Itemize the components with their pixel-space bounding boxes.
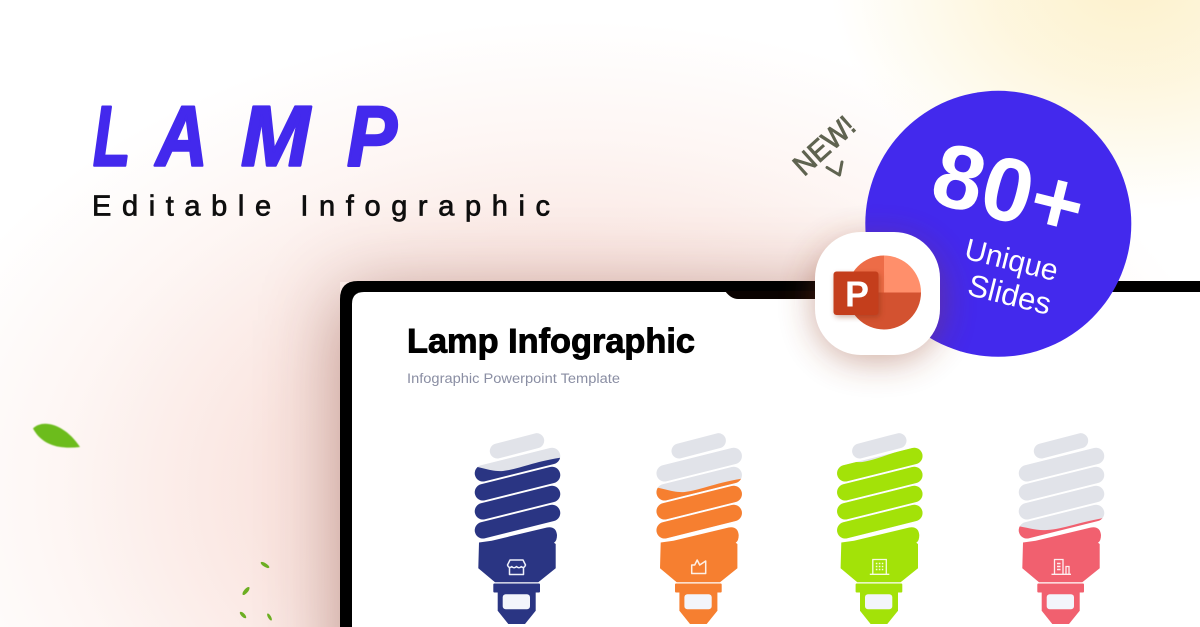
icon: store	[508, 560, 526, 574]
label: NEW!: NEW!	[787, 110, 862, 182]
bulb 2: orange, factory icon	[660, 441, 739, 624]
heading: LAMP: P	[347, 89, 397, 184]
bulb 3: green, building icon	[841, 441, 919, 624]
icon: towers	[1052, 560, 1071, 574]
bulb 4: pink, tower icon	[1022, 441, 1101, 624]
heading: LAMP: M	[241, 88, 312, 184]
icon: office building	[870, 560, 889, 574]
subheading: Editable Infographic: Editable Infographic	[92, 190, 550, 222]
bulb 1: navy, store icon	[478, 441, 557, 624]
laptop notch	[725, 291, 880, 299]
laptop glow	[340, 282, 780, 627]
PowerPoint app icon	[815, 232, 940, 360]
icon: factory	[692, 560, 706, 574]
leaves: small	[239, 561, 273, 621]
PowerPoint app icon: P	[845, 274, 869, 314]
badge: 80+ Unique Slides: 80+	[923, 124, 1095, 258]
slide title: Lamp Infographic	[407, 323, 695, 361]
badge: 80+ Unique Slides: Slides	[964, 267, 1055, 322]
laptop frame	[340, 281, 1200, 627]
leaf: large	[33, 424, 80, 448]
heading: LAMP: A	[154, 89, 208, 184]
slide subtitle: Infographic Powerpoint Template	[407, 371, 620, 386]
badge: 80+ Unique Slides	[865, 91, 1131, 357]
badge: 80+ Unique Slides: Unique	[961, 233, 1061, 288]
heading: LAMP	[93, 88, 397, 184]
heading: LAMP: L	[93, 89, 130, 184]
